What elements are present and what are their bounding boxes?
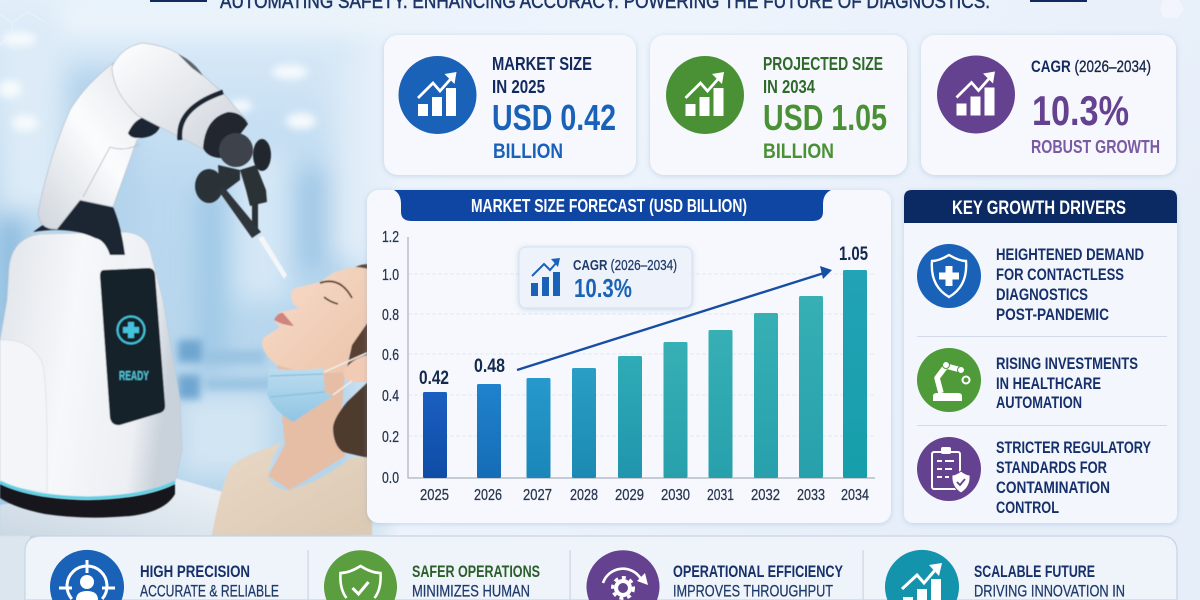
wrist side joint	[253, 139, 271, 171]
icon: shield with cross	[917, 244, 981, 308]
y axis labels: 1.0	[382, 267, 399, 284]
panel: key growth drivers	[904, 190, 1177, 523]
stat card: market size 2025: BILLION	[493, 140, 563, 163]
face	[262, 267, 368, 373]
hairline	[355, 264, 368, 269]
upper hair	[346, 322, 368, 372]
screen label: READY	[119, 368, 149, 383]
stat card: market size 2025: USD 0.42	[492, 97, 616, 138]
illustration: woman receiving nasal swab	[212, 264, 372, 535]
icon: growth chart green	[666, 56, 744, 134]
callout: CAGR	[519, 247, 692, 308]
chart title banner	[394, 190, 831, 221]
callout text: CAGR (2026–2034)	[573, 258, 677, 274]
driver text: CONTROL	[996, 499, 1059, 517]
header rule left	[150, 0, 207, 2]
driver text: STANDARDS FOR	[996, 459, 1107, 477]
driver text: RISING INVESTMENTS	[996, 355, 1138, 373]
icon: target person	[50, 550, 124, 600]
panel: bottom benefits strip	[25, 536, 1177, 600]
chart title banner: MARKET SIZE FORECAST (USD BILLION)	[471, 196, 747, 216]
benefit text: OPERATIONAL EFFICIENCY	[673, 563, 843, 581]
robot glow ring	[0, 482, 175, 498]
stat card: market size 2025: IN 2025	[492, 77, 545, 97]
benefit: safer operations: MINIMIZES HUMAN	[412, 582, 530, 600]
bar value labels	[419, 244, 868, 389]
sweater	[212, 442, 372, 535]
benefit: high precision: ACCURATE & RELIABLE	[140, 582, 279, 600]
driver 3: regulatory standards	[917, 437, 1151, 517]
stat card: CAGR	[921, 35, 1176, 175]
icon: growth chart purple	[937, 56, 1015, 134]
forearm dark band	[180, 92, 223, 140]
x axis year labels: 2033	[797, 487, 825, 504]
screen plus icon	[118, 316, 144, 344]
bar value labels: 1.05	[839, 244, 868, 265]
bar chart bars	[423, 270, 867, 478]
stat card: market size 2025	[384, 35, 636, 175]
x axis year labels: 2032	[751, 487, 780, 504]
mask pleats	[270, 374, 325, 397]
chart gridlines and axes	[408, 237, 875, 478]
robot base body	[0, 232, 182, 497]
eyebrow	[320, 281, 352, 298]
icon: callout growth chart	[531, 258, 560, 296]
y axis labels: 0.4	[382, 388, 399, 405]
icon: growth chart teal	[885, 550, 959, 600]
x axis year labels: 2031	[707, 487, 734, 504]
driver text	[996, 439, 1151, 517]
stat card: projected size 2034: USD 1.05	[763, 97, 887, 138]
icon: growth chart blue	[398, 56, 476, 134]
y axis labels: 1.2	[382, 229, 399, 246]
card text: MARKET SIZE	[492, 54, 592, 74]
bar value labels: 0.48	[474, 356, 505, 377]
icon: robot arm	[917, 348, 981, 412]
benefit: operational efficiency: IMPROVES THROUGHPUT	[673, 582, 833, 600]
elbow and forearm	[112, 43, 248, 150]
panel: market size forecast chart	[367, 190, 891, 523]
stat card: CAGR: 10.3%	[1032, 87, 1129, 134]
bar value labels: 0.42	[419, 368, 449, 389]
card text: CAGR (2026–2034)	[1031, 57, 1151, 76]
benefit text: HIGH PRECISION	[140, 563, 250, 581]
driver text: AUTOMATION	[996, 394, 1082, 412]
benefit: scalable future: DRIVING INNOVATION IN	[974, 582, 1125, 600]
benefit: high precision	[50, 550, 279, 600]
driver text: CONTAMINATION	[996, 479, 1110, 497]
driver text: HEIGHTENED DEMAND	[996, 246, 1144, 264]
driver text: IN HEALTHCARE	[996, 375, 1101, 393]
gripper rod diagonal	[218, 186, 261, 238]
benefit: safer operations	[324, 550, 540, 600]
neck	[268, 362, 345, 490]
gripper right barrel	[240, 165, 267, 206]
stat card: projected size 2034: IN 2034	[763, 77, 815, 97]
driver text: DIAGNOSTICS	[996, 286, 1088, 304]
mask straps	[324, 353, 367, 395]
driver text	[996, 355, 1138, 412]
elbow cap	[178, 54, 203, 76]
stat card: projected size 2034	[650, 35, 907, 175]
robot base ring	[0, 484, 175, 518]
header rule right	[1030, 0, 1087, 2]
gripper rod vertical	[252, 203, 258, 230]
driver text: POST-PANDEMIC	[996, 306, 1109, 324]
stat card: CAGR: ROBUST GROWTH	[1031, 137, 1160, 157]
illustration: robotic arm	[0, 43, 287, 518]
gripper left knob	[195, 169, 223, 203]
driver text: STRICTER REGULATORY	[996, 439, 1151, 457]
background: blurred hospital scene	[0, 0, 400, 540]
y axis labels: 0.6	[382, 347, 399, 364]
benefit text: SCALABLE FUTURE	[974, 563, 1095, 581]
gripper connector	[218, 165, 240, 195]
drivers header: KEY GROWTH DRIVERS	[952, 198, 1126, 219]
x axis year labels: 2029	[615, 487, 644, 504]
elbow joint	[128, 117, 160, 138]
icon: clipboard with shield	[917, 437, 981, 501]
dark shoulder joint	[33, 198, 125, 255]
white table	[0, 478, 223, 536]
benefit text: SAFER OPERATIONS	[412, 563, 540, 581]
drivers header	[904, 190, 1177, 223]
wrist joint	[219, 133, 253, 167]
lips	[274, 313, 294, 326]
wrist collar	[203, 112, 248, 158]
lower arm	[38, 63, 160, 229]
benefit: operational efficiency	[586, 550, 843, 600]
lower hair	[333, 382, 368, 458]
benefit: scalable future	[885, 550, 1125, 600]
driver 1: contactless diagnostics	[917, 244, 1144, 324]
y axis labels: 0.0	[382, 470, 399, 487]
stat card: projected size 2034: BILLION	[763, 140, 834, 163]
lower arm panel seam	[83, 144, 140, 197]
robot screen	[100, 268, 165, 425]
x axis year labels: 2028	[570, 487, 598, 504]
x axis year labels: 2025	[420, 487, 449, 504]
closed eye	[324, 297, 338, 304]
y axis labels: 0.2	[382, 429, 399, 446]
icon: shield check	[324, 550, 397, 600]
x axis year labels: 2034	[841, 487, 869, 504]
swab	[258, 236, 287, 279]
driver 2: healthcare automation	[917, 348, 1138, 412]
driver text: FOR CONTACTLESS	[996, 266, 1124, 284]
ear	[343, 355, 368, 382]
arrow: growth trend	[517, 266, 832, 370]
x axis year labels: 2030	[661, 487, 690, 504]
y axis labels	[382, 229, 399, 487]
callout: CAGR: 10.3%	[574, 273, 632, 303]
y axis labels: 0.8	[382, 307, 399, 324]
x axis year labels: 2027	[523, 487, 552, 504]
surgical mask	[267, 368, 333, 422]
icon: gear with cycle arrows	[586, 550, 660, 600]
driver text	[996, 246, 1144, 324]
robot base front bulge	[0, 340, 47, 492]
x axis year labels: 2026	[474, 487, 502, 504]
card text: PROJECTED SIZE	[763, 54, 883, 74]
x axis year labels	[420, 487, 869, 504]
